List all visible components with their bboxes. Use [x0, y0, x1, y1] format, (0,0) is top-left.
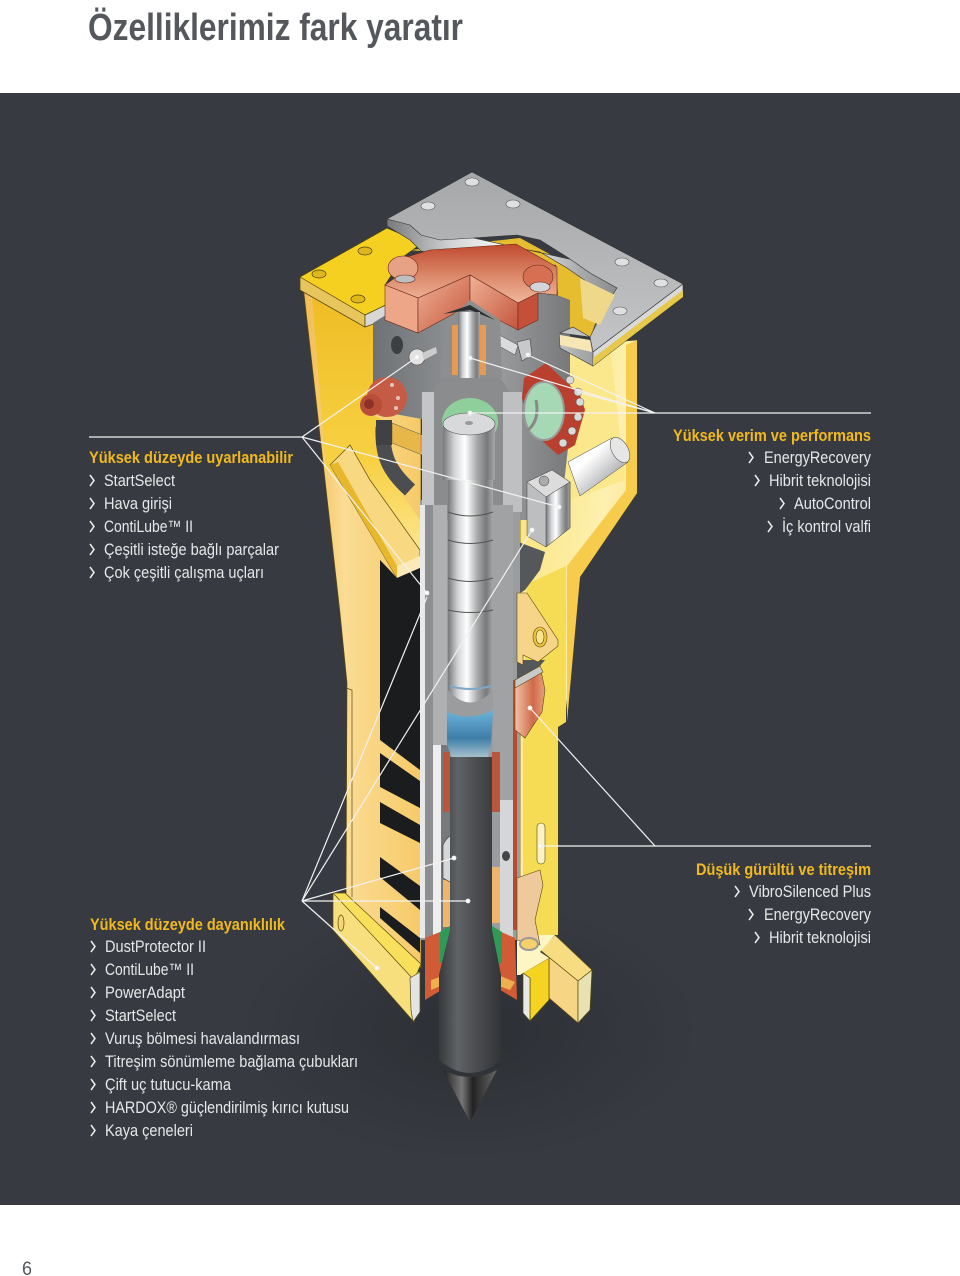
soft shadow under breaker [240, 900, 700, 1160]
text block: Yüksek düzeyde dayanıklılık [90, 915, 358, 1140]
upper rod and sleeves [440, 300, 502, 388]
leader lines top right [468, 353, 871, 415]
text block: Yüksek düzeyde dayanıklılık: Yüksek düzeyde dayanıklılık [90, 915, 285, 934]
tool tip [443, 1070, 497, 1122]
right housing wall [513, 340, 637, 935]
text block: Yüksek düzeyde uyarlanabilir: StartSelect [104, 472, 175, 490]
text block: Yüksek verim ve performans: EnergyRecovery [764, 449, 872, 467]
text block: Yüksek düzeyde dayanıklılık: DustProtector II [105, 938, 206, 956]
text block: Yüksek verim ve performans: İç kontrol valfi [782, 517, 871, 536]
leader lines top left [89, 355, 561, 595]
text block: Yüksek düzeyde dayanıklılık: ContiLube™ II [105, 961, 194, 979]
blue seal section [447, 710, 493, 757]
text block: Yüksek verim ve performans: Hibrit teknolojisi [769, 472, 871, 490]
red bushing [443, 752, 500, 812]
text block: Yüksek düzeyde dayanıklılık: Çift uç tutucu-kama [105, 1076, 232, 1094]
text block: Yüksek düzeyde uyarlanabilir: Çeşitli isteğe bağlı parçalar [104, 541, 279, 559]
left red valve and hose [360, 377, 430, 490]
right bottom foot [517, 935, 592, 1023]
text block: Düşük gürültü ve titreşim: Hibrit teknolojisi [769, 929, 871, 947]
central gray tube [420, 378, 522, 940]
left window [443, 835, 460, 882]
black openings in left wall [380, 560, 420, 953]
gray valve block [373, 262, 570, 520]
breaker tool [439, 757, 501, 1073]
gray top plate [387, 172, 683, 366]
text block: Yüksek düzeyde dayanıklılık: HARDOX® güçlendirilmiş kırıcı kutusu [105, 1099, 349, 1117]
text block: Yüksek düzeyde dayanıklılık: PowerAdapt [105, 984, 185, 1002]
red accumulator with bolts [522, 363, 585, 455]
leader lines bottom right [528, 706, 871, 848]
text block: Yüksek düzeyde uyarlanabilir [89, 448, 293, 582]
text block: Düşük gürültü ve titreşim: Düşük gürültü ve titreşim [696, 860, 871, 879]
text block: Yüksek düzeyde dayanıklılık: Titreşim sönümleme bağlama çubukları [105, 1053, 358, 1071]
leader lines bottom left [302, 528, 534, 970]
right lug and brackets [515, 593, 558, 950]
text block: Yüksek düzeyde dayanıklılık: Kaya çeneleri [105, 1122, 193, 1140]
text block: Yüksek verim ve performans: AutoControl [794, 495, 871, 513]
piston [443, 413, 495, 702]
yellow top left flange [300, 228, 422, 327]
text block: Yüksek düzeyde dayanıklılık: Vuruş bölmesi havalandırması [105, 1030, 300, 1048]
text block: Düşük gürültü ve titreşim [696, 860, 872, 947]
text block: Yüksek verim ve performans: Yüksek verim ve performans [673, 426, 871, 445]
left housing wall [303, 285, 421, 968]
title: Özelliklerimiz fark yaratır [88, 6, 463, 49]
text block: Yüksek düzeyde uyarlanabilir: ContiLube™ II [104, 518, 193, 536]
text block: Düşük gürültü ve titreşim: VibroSilenced Plus [749, 883, 871, 901]
text block: Yüksek düzeyde uyarlanabilir: Hava girişi [104, 495, 172, 513]
green dome [442, 398, 498, 446]
text block: Yüksek düzeyde dayanıklılık: StartSelect [105, 1007, 176, 1025]
text block: Düşük gürültü ve titreşim: EnergyRecovery [764, 906, 872, 924]
left bottom foot plate [333, 893, 421, 1022]
text block: Yüksek düzeyde uyarlanabilir: Çok çeşitli çalışma uçları [104, 564, 264, 582]
yellow recess behind block [410, 238, 625, 340]
lower seals [425, 926, 517, 1000]
hydraulic breaker cutaway illustration [300, 172, 683, 1122]
red cross block [385, 244, 557, 333]
text block: Yüksek verim ve performans [673, 426, 872, 536]
right block with valve cylinder [527, 434, 634, 547]
text block: Yüksek düzeyde uyarlanabilir: Yüksek düzeyde uyarlanabilir [89, 448, 293, 467]
